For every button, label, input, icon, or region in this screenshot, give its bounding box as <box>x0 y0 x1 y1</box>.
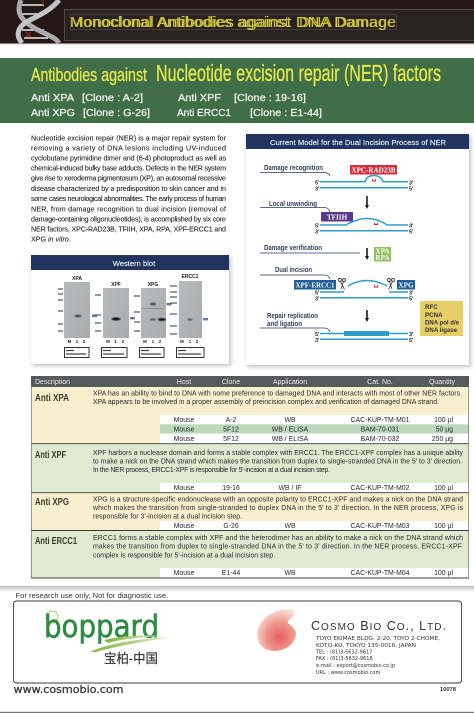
row: Anti ERCC1: Mouse <box>174 570 195 577</box>
company address: TEL : (81)3-5632-9617 <box>315 650 372 656</box>
blot: XPA <box>58 276 97 358</box>
step: damage recognition: 3' <box>409 180 414 186</box>
clone list: Anti XPA <box>31 92 74 104</box>
row: Anti XPG: which makes the transition from single-stranded to duplex DNA in the 5' to 3' direction. In the NER process, XPG is <box>92 505 464 512</box>
row: Anti XPA: 250 µg <box>432 436 453 443</box>
website: www.cosmobio.com <box>14 683 124 696</box>
blot: XPA: 1 <box>76 339 79 344</box>
row: Anti XPA: WB / ELISA <box>272 436 309 443</box>
footer box <box>14 601 462 683</box>
row: Anti XPF: Mouse <box>174 485 195 492</box>
intro text block: give rise to xeroderma pigmentosum (XP), an autosomal recessive <box>31 175 226 183</box>
row: Anti XPA: Mouse <box>174 426 195 434</box>
intro text block: some cases neurological abnormalities. The early process of human <box>31 195 226 203</box>
row: Anti XPA: 5F12 <box>223 426 239 434</box>
row: Anti XPA: WB / ELISA <box>272 426 309 434</box>
row: Anti XPG: CAC-KUP-TM-M03 <box>351 523 410 530</box>
icon: DNA helix <box>18 0 59 43</box>
callout: replication factors: RFC <box>425 304 438 311</box>
step: dual incision: XPG <box>398 282 414 290</box>
blot: XPG: M <box>143 339 147 344</box>
clone list: [Clone : E1-44] <box>250 107 322 119</box>
blot: XPA: 2 <box>83 339 86 344</box>
step: damage recognition: 5' <box>315 180 320 186</box>
company address: URL : www.cosmobio.com <box>316 670 380 676</box>
disclaimer: For research use only, Not for diagnostic use. <box>16 591 168 600</box>
intro text block: cyclobutane pyrimidine dimer and (6-4) photoproduct as well as <box>31 154 226 162</box>
header banner <box>0 0 474 44</box>
step: dual incision: Dual incision <box>275 265 312 274</box>
row: Anti XPA: A-2 <box>226 417 237 424</box>
step: dual incision: 3' <box>315 296 320 302</box>
row: Anti ERCC1: CAC-KUP-TM-M04 <box>351 570 410 577</box>
blot: XPG: 1 <box>152 339 155 344</box>
step: local unwinding: 5' <box>315 224 320 230</box>
clone list: [Clone : 19-16] <box>234 92 306 104</box>
clone list: Anti XPG <box>31 107 75 119</box>
blot: XPF: 1 <box>114 339 117 344</box>
step: repair replication and ligation: 5' <box>315 332 320 338</box>
callout: replication factors <box>420 301 463 336</box>
row: Anti XPA: BAM-70-032 <box>361 436 400 443</box>
row: Anti ERCC1: WB <box>284 570 296 577</box>
row: Anti ERCC1 <box>31 531 469 578</box>
step: damage recognition: 3' <box>315 186 320 192</box>
intro text block: Nucleotide excision repair (NER) is a major repair system for <box>31 134 227 142</box>
row: Anti XPF: XPF harbors a nuclease domain and forms a stable complex with ERCC1. The ERCC1-XPF complex has a unique ability <box>93 450 464 457</box>
row: Anti XPF: 19-16 <box>222 485 240 492</box>
row: Anti XPA: 5F12 <box>223 436 239 443</box>
step: local unwinding: 5' <box>409 230 414 236</box>
panel: dual incision model <box>246 134 471 367</box>
callout: replication factors: PCNA <box>425 312 443 319</box>
intro text block: disease characterized by a predisposition to skin cancer and in <box>31 185 226 193</box>
step: local unwinding: Local unwinding <box>269 199 317 208</box>
product table <box>31 376 469 578</box>
row: Anti XPF <box>31 444 469 492</box>
step: dual incision: 5' <box>409 296 414 302</box>
footer shadow <box>0 586 474 592</box>
row: Anti XPF: to make a nick on the DNA strand which makes the transition from duplex to single-stranded DNA in the 5' to 3' direction. <box>93 458 462 466</box>
step: dual incision: 3' <box>409 290 414 296</box>
row: Anti ERCC1: ERCC1 forms a stable complex with XPF and the heterodimer has an ability to make a nick on the DNA strand which <box>93 535 463 542</box>
step: dual incision <box>260 265 415 302</box>
title: Monoclonal Antibodies against DNA Damage <box>70 14 396 31</box>
intro text block: chemical-induced bulky base adducts. Defects in the NER system <box>31 164 226 172</box>
blot: XPF: XPF <box>111 282 121 288</box>
blot: XPF: 2 <box>122 339 125 344</box>
company address: TOYO EKIMAE BLDG. 2-20, TOYO 2-CHOME, <box>315 636 440 642</box>
row: Anti ERCC1: E1-44 <box>222 570 240 577</box>
step: repair replication and ligation: 5' <box>409 338 414 344</box>
callout: replication factors: DNA ligase <box>425 327 458 334</box>
blot: XPA: M <box>68 339 72 344</box>
clone list: Anti XPF <box>178 92 221 104</box>
blot: ERCC1: M <box>180 339 184 344</box>
panel: western blot <box>31 255 231 366</box>
step: dual incision: 5' <box>315 290 320 296</box>
intro text block <box>31 134 227 244</box>
intro text block: NER, from damage recognition to dual incision (removal of <box>31 205 226 213</box>
row: Anti XPG: 100 µl <box>434 523 453 530</box>
intro text block: damage-containing oligonucleotides), is accomplished by six core <box>31 215 226 223</box>
catalog number: 10078 <box>440 687 457 693</box>
step: damage verification <box>260 243 391 262</box>
row: Anti ERCC1: 100 µl <box>434 570 453 577</box>
heading <box>31 60 441 86</box>
table header: Quantity <box>429 379 456 386</box>
row: Anti XPA: BAM-70-031 <box>361 426 400 434</box>
company address: KOTO-KU, TOKYO 135-0016, JAPAN <box>316 643 416 649</box>
step: local unwinding: 3' <box>315 230 320 236</box>
row: Anti XPG: responsible for 3'-incision at a dual incision step. <box>93 514 242 520</box>
blot: ERCC1: 1 <box>189 339 192 344</box>
row: Anti XPA: XPA appears to be involved in a proper assembly of preincision complex and verification of damaged DNA strand. <box>93 399 439 406</box>
step: repair replication and ligation: 3' <box>315 338 320 344</box>
blot: XPG <box>134 282 172 358</box>
step: damage verification: Damage verification <box>264 243 322 252</box>
row: Anti XPG: WB <box>284 523 296 530</box>
step: repair replication and ligation: Repair replication <box>267 311 318 320</box>
row: Anti XPF: In the NER process, ERCC1-XPF is responsible for 5'-incision at a dual incision step. <box>93 467 330 474</box>
table header: Host <box>177 379 191 386</box>
row: Anti XPA <box>31 387 469 444</box>
row: Anti XPA: XPA has an ability to bind to DNA with some preference to damaged DNA and interacts with most of other NER factors. <box>93 390 462 398</box>
blot: XPF <box>95 282 135 358</box>
blot: ERCC1: ERCC1 <box>182 274 199 280</box>
table header: Description <box>35 379 70 386</box>
step: damage recognition: Damage recognition <box>264 163 323 172</box>
green title band <box>0 58 474 123</box>
step: damage verification: RPA <box>375 254 390 262</box>
row: Anti XPA: Anti XPA <box>35 392 69 404</box>
clone list: Anti ERCC1 <box>177 107 231 119</box>
blot: XPG: 2 <box>159 339 162 344</box>
blot: XPG: XPG <box>148 282 158 288</box>
row: Anti XPG: Anti XPG <box>35 496 69 508</box>
row: Anti XPF: 100 µl <box>434 485 453 492</box>
blot: ERCC1 <box>170 274 208 358</box>
blot: ERCC1: 2 <box>196 339 199 344</box>
step: local unwinding: 3' <box>409 224 414 230</box>
step: repair replication and ligation <box>260 311 414 344</box>
callout: replication factors: DNA pol d/e <box>425 319 460 326</box>
row: Anti XPA: CAC-KUP-TM-M01 <box>351 417 410 424</box>
logo: boppard <box>44 609 172 666</box>
blot: XPA: XPA <box>72 276 82 282</box>
icon: scissors <box>338 278 394 290</box>
step: damage recognition: 5' <box>409 186 414 192</box>
row: Anti ERCC1: makes the transition from duplex to single-stranded DNA in the 5' to 3' direction. In the NER process, ERCC1-XPF <box>93 544 462 550</box>
arrow <box>365 310 369 322</box>
company address: e-mail : export@cosmobio.co.jp <box>316 663 395 669</box>
company address: FAX : (81)3-5632-9618 <box>316 656 373 662</box>
table header: Application <box>273 379 307 386</box>
row: Anti XPA: Mouse <box>174 417 195 424</box>
step: repair replication and ligation: and ligation <box>267 319 302 328</box>
row: Anti XPA: Mouse <box>174 436 195 443</box>
step: local unwinding: TFIIH <box>327 214 348 222</box>
row: Anti XPF: CAC-KUP-TM-M02 <box>351 485 410 492</box>
table header <box>31 376 469 387</box>
row: Anti XPG: XPG is a structure-specific endonuclease with an opposite polarity to ERCC1-XPF and makes a nick on the DNA strand <box>93 496 463 504</box>
step: damage verification: XPA <box>375 248 390 256</box>
logo: boppard: boppard <box>44 609 159 645</box>
row: Anti XPF: WB / IF <box>279 485 301 492</box>
row: Anti XPA: WB <box>284 417 296 424</box>
title: Monoclonal Antibodies against DNA Damage <box>70 14 396 31</box>
intro text block: removing a variety of DNA lesions including UV-induced <box>31 144 226 152</box>
clone list <box>31 92 322 119</box>
company name: COSMO BIO CO., LTD. <box>311 619 446 633</box>
step: dual incision: XPF-ERCC1 <box>296 282 335 290</box>
table header: Cat. No. <box>367 379 393 386</box>
arrow <box>365 196 369 209</box>
step: damage recognition <box>260 163 414 192</box>
step: damage recognition: XPC-RAD23B <box>352 166 396 174</box>
clone list: [Clone : G-26] <box>83 107 150 119</box>
heading: model: Current Model for the Dual Incision Process of NER <box>270 138 447 147</box>
row: Anti XPG: Mouse <box>174 523 195 530</box>
row: Anti ERCC1: complex is responsible for 5'-incision at a dual incision step. <box>93 552 275 560</box>
heading: Antibodies against <box>31 64 147 85</box>
company address <box>315 636 440 676</box>
row: Anti XPG: G-26 <box>223 523 239 530</box>
row: Anti ERCC1: Anti ERCC1 <box>35 535 77 547</box>
table header: Clone <box>222 379 240 386</box>
logo: boppard: 宝柏-中国 <box>104 651 158 666</box>
row: Anti XPF: Anti XPF <box>35 449 66 461</box>
clone list: [Clone : A-2] <box>82 92 143 104</box>
intro text block: NER factors, XPC-RAD23B, TFIIH, XPA, RPA, XPF-ERCC1 and <box>31 225 226 233</box>
step: repair replication and ligation: 3' <box>409 332 414 338</box>
intro text block: XPG in vitro. <box>31 236 71 244</box>
step: local unwinding <box>260 199 414 236</box>
row: Anti XPG <box>31 493 469 530</box>
logo: Cosmo Bio <box>257 609 296 651</box>
blot: XPF: M <box>106 339 110 344</box>
heading: western blot: Western blot <box>113 259 156 268</box>
row: Anti XPA: 100 µl <box>434 417 453 424</box>
row: Anti XPA: 50 µg <box>436 426 453 434</box>
